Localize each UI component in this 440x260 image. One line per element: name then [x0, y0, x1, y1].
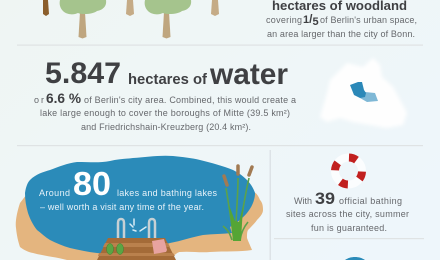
water — [25, 156, 255, 256]
text: woodland description: 1/ — [303, 12, 312, 26]
heading: water figure: hectares of — [128, 72, 207, 88]
heading: water figure: 5.847 — [45, 57, 121, 90]
illustration: lake — [16, 156, 263, 260]
map: Friedrichshain-Kreuzberg — [360, 92, 378, 102]
text: bathing sites: With — [294, 196, 312, 206]
text: lake count — [39, 165, 218, 212]
icon: tree right — [145, 0, 191, 38]
text: water description: lake large enough to cover the boroughs of Mitte (39.5 km²) — [40, 108, 290, 118]
text: water description: of Berlin's city area. Combined, this would create a — [84, 95, 296, 105]
icon: tree left — [60, 0, 106, 38]
icon: trunk middle — [126, 0, 134, 16]
map: Berlin — [320, 58, 407, 128]
icon: life ring — [335, 157, 362, 185]
text: water description: and Friedrichshain-Kreuzberg (20.4 km²). — [81, 122, 251, 132]
text: bathing sites: fun is guaranteed. — [311, 223, 387, 233]
icon: splash — [130, 219, 146, 231]
text: woodland description: of Berlin's urban space, — [320, 15, 417, 25]
text: woodland description: covering — [266, 15, 302, 25]
icon: trunk right — [211, 0, 219, 16]
text: woodland description — [266, 12, 417, 39]
text: woodland description: an area larger than the city of Bonn. — [267, 29, 415, 39]
text: bathing sites: 39 — [315, 189, 335, 208]
panel: woodland trees — [43, 0, 219, 38]
icon: flip-flops — [106, 244, 124, 254]
text: bathing sites: sites across the city, summer — [286, 209, 409, 219]
icon: towel — [152, 239, 167, 254]
icon: dark tree trunk — [43, 0, 49, 16]
text: water description — [34, 91, 296, 132]
icon: dock — [97, 238, 176, 260]
icon: reeds — [223, 166, 252, 241]
heading: water figure — [45, 57, 288, 91]
text: lake count: Around — [39, 188, 70, 198]
text: water description: 6.6 % — [46, 91, 81, 106]
icon: ladder rails — [118, 219, 155, 240]
text: water description: or — [34, 95, 44, 105]
text: lake count: – well worth a visit any time of the year. — [40, 202, 204, 212]
icon: next section arc — [345, 257, 365, 260]
text: lake count: 80 — [73, 165, 111, 202]
sand — [16, 190, 263, 260]
text: woodland description: 5 — [312, 16, 319, 28]
text: bathing sites — [286, 189, 409, 233]
text: lake count: lakes and bathing lakes — [117, 188, 218, 198]
map: Mitte — [350, 82, 366, 98]
text: bathing sites: official bathing — [339, 196, 402, 206]
heading: water figure: water — [209, 58, 288, 91]
